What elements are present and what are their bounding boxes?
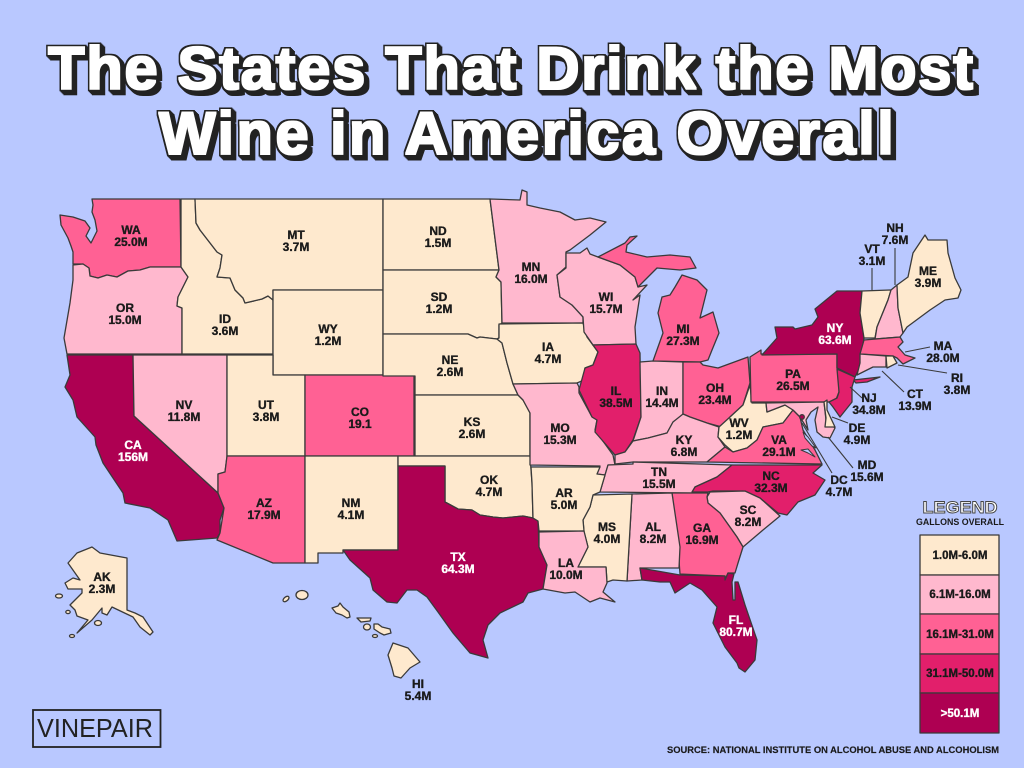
label: MD: MD: [858, 458, 877, 472]
state: Arizona: [217, 456, 305, 563]
state: Minnesota: [490, 190, 606, 323]
label: DE: DE: [849, 421, 865, 435]
state: South Dakota: [383, 270, 502, 339]
label: MT: MT: [287, 228, 305, 242]
state: Florida: [640, 568, 757, 672]
label: KY: 6.8M: [671, 445, 697, 459]
label: ID: ID: [219, 312, 231, 326]
state: Utah: [227, 355, 305, 456]
label: MT: 3.7M: [283, 240, 309, 254]
state: Rhode Island: [886, 356, 897, 368]
leader lines: [802, 248, 947, 473]
label: NY: 63.6M: [818, 333, 852, 347]
island: Hawaii Lanai: [364, 624, 370, 630]
state: Washington DC: [800, 415, 804, 419]
label: TN: 15.5M: [642, 477, 676, 491]
legend swatch 4: [920, 654, 999, 693]
label: ND: 1.5M: [425, 236, 451, 250]
label: AK: 2.3M: [89, 582, 115, 596]
label: DE: 4.9M: [844, 433, 870, 447]
state: New York Long Island: [853, 377, 880, 383]
label: AR: 5.0M: [551, 498, 577, 512]
label: MO: MO: [550, 421, 570, 435]
label: OR: OR: [116, 301, 134, 315]
state: Oregon: [64, 264, 188, 354]
state: Wyoming: [273, 290, 383, 375]
state: Connecticut: [857, 354, 886, 375]
legend swatch 2: [920, 575, 999, 614]
island: Hawaii Niihau: [282, 595, 290, 603]
label: PA: 26.5M: [776, 379, 810, 393]
label: IL: IL: [611, 384, 621, 398]
state: South Carolina: [707, 491, 780, 547]
state: New Mexico: [305, 456, 398, 563]
label: IA: IA: [542, 340, 554, 354]
source: SOURCE: NATIONAL INSTITUTE ON ALCOHOL ABUSE AND ALCOHOLISM: [667, 745, 999, 756]
label: WY: WY: [318, 322, 338, 336]
label: VT: 3.1M: [859, 254, 885, 268]
label: NV: NV: [176, 398, 192, 412]
label: CT: CT: [907, 387, 924, 401]
legend swatch 1: [920, 535, 999, 575]
label: CO: CO: [351, 405, 369, 419]
label: IL: 38.5M: [599, 396, 633, 410]
label: IN: IN: [656, 384, 668, 398]
state: Washington: [60, 199, 181, 278]
label: MA: MA: [934, 339, 953, 353]
label: KS: KS: [464, 415, 480, 429]
label: NY: NY: [827, 321, 843, 335]
legend swatch 5: >50.1M: [941, 708, 979, 720]
label: NM: 4.1M: [338, 508, 364, 522]
label: CA: 156M: [118, 450, 148, 464]
state: New York: [762, 291, 864, 377]
label: WV: 1.2M: [726, 428, 752, 442]
legend swatch 3: 16.1M-31.0M: [926, 629, 994, 641]
state: Idaho: [177, 199, 273, 354]
label: VA: VA: [771, 433, 787, 447]
label: CA: CA: [124, 438, 142, 452]
state: Maryland: [766, 402, 835, 438]
title: The States That Drink the Most: [48, 35, 975, 102]
label: LA: 10.0M: [549, 568, 583, 582]
legend swatch 1: 1.0M-6.0M: [933, 550, 987, 562]
island: Hawaii Maui: [374, 624, 391, 635]
state: Georgia: [672, 493, 743, 580]
label: NJ: NJ: [861, 391, 877, 405]
island: Hawaii Oahu: [332, 603, 350, 618]
label: WV: WV: [729, 416, 749, 430]
state: Illinois: [579, 344, 641, 455]
label: SD: 1.2M: [426, 302, 452, 316]
legend swatch 5: [920, 693, 999, 733]
state: Maine: [897, 235, 961, 333]
state: Virginia: [707, 410, 822, 464]
state: Louisiana: [539, 531, 615, 602]
label: AZ: 17.9M: [247, 508, 281, 522]
label: HI: 5.4M: [405, 689, 431, 703]
label: KS: 2.6M: [459, 427, 485, 441]
label: MN: MN: [522, 260, 540, 274]
state: Mississippi: [578, 494, 632, 582]
state: Missouri: [513, 383, 615, 475]
state: Arkansas: [531, 467, 605, 531]
state: California: [65, 355, 224, 541]
legend swatch 3: [920, 614, 999, 654]
state: New Jersey: [829, 369, 855, 417]
label: MO: 15.3M: [543, 433, 577, 447]
label: WA: 25.0M: [114, 235, 148, 249]
label: AZ: AZ: [256, 496, 272, 510]
state: North Dakota: [383, 199, 499, 270]
legend title: LEGEND: [922, 498, 998, 517]
state: Indiana: [633, 361, 683, 441]
label: FL: FL: [729, 613, 743, 627]
label: LA: LA: [558, 556, 574, 570]
state: Massachusetts: [860, 337, 915, 364]
Chesapeake bay inlets: [801, 432, 816, 457]
label: OR: 15.0M: [108, 313, 142, 327]
label: NE: NE: [442, 353, 458, 367]
label: OK: OK: [480, 473, 498, 487]
label: IN: 14.4M: [645, 396, 679, 410]
state: Ohio: [683, 357, 750, 427]
label: NH: 7.6M: [882, 233, 908, 247]
island: Alaska Kodiak: [94, 620, 102, 626]
label: MI: 27.3M: [666, 334, 700, 348]
state: Oklahoma: [398, 456, 533, 518]
label: HI: HI: [412, 677, 424, 691]
state: Alaska: [65, 547, 153, 635]
label: NE: 2.6M: [437, 365, 463, 379]
label: WI: 15.7M: [589, 302, 623, 316]
state: Delaware: [824, 400, 835, 427]
label: DC: DC: [830, 473, 848, 487]
label: GA: 16.9M: [685, 533, 719, 547]
legend: [916, 498, 1004, 733]
label: MD: 15.6M: [850, 470, 884, 484]
island: Hawaii Big Island: [388, 643, 420, 678]
label: UT: UT: [258, 398, 275, 412]
label: MA: 28.0M: [926, 351, 960, 365]
label: ME: ME: [919, 264, 937, 278]
label: TX: TX: [450, 550, 466, 564]
island: Hawaii Kahoolawe: [372, 634, 378, 638]
state: Pennsylvania: [750, 350, 840, 402]
label: MS: MS: [598, 520, 616, 534]
state: Montana: [195, 199, 383, 303]
island: Hawaii Molokai: [357, 618, 371, 622]
label: DC: 4.7M: [826, 485, 852, 499]
label: WA: WA: [121, 223, 141, 237]
label: WI: WI: [599, 290, 613, 304]
label: OK: 4.7M: [476, 485, 502, 499]
label: TN: TN: [651, 465, 667, 479]
label: SC: SC: [740, 503, 757, 517]
label: AK: AK: [93, 570, 111, 584]
state: Wisconsin: [557, 248, 647, 345]
label: GA: GA: [693, 521, 711, 535]
label: RI: RI: [951, 371, 963, 385]
label: NJ: 34.8M: [852, 403, 886, 417]
state: Michigan Lower Peninsula: [653, 275, 719, 362]
label: MS: 4.0M: [594, 532, 620, 546]
state: Tennessee: [600, 462, 732, 493]
legend subtitle: GALLONS OVERALL: [916, 517, 1004, 527]
label: RI: 3.8M: [944, 383, 970, 397]
island: Aleutian west: [56, 594, 62, 598]
island: Aleutian middle: [66, 610, 70, 614]
label: IA: 4.7M: [535, 352, 561, 366]
label: FL: 80.7M: [719, 625, 753, 639]
state: Iowa: [497, 323, 598, 384]
state: Kentucky: [615, 414, 725, 464]
label: SC: 8.2M: [735, 515, 761, 529]
legend swatch 2: 6.1M-16.0M: [929, 589, 991, 601]
label: OH: OH: [706, 381, 724, 395]
label: OH: 23.4M: [698, 393, 732, 407]
island: Aleutian south: [70, 634, 74, 638]
state: New Hampshire: [875, 285, 903, 339]
label: KY: KY: [676, 433, 692, 447]
label: CT: 13.9M: [898, 399, 932, 413]
state: Kansas: [415, 395, 530, 456]
label: WY: 1.2M: [315, 334, 341, 348]
label: AR: AR: [555, 486, 573, 500]
label: TX: 64.3M: [441, 562, 475, 576]
label: NC: NC: [762, 469, 780, 483]
label: SD: SD: [431, 290, 448, 304]
label: PA: PA: [785, 367, 801, 381]
label: UT: 3.8M: [253, 410, 279, 424]
label: NC: 32.3M: [754, 481, 788, 495]
state: North Carolina: [692, 465, 825, 515]
legend swatch 4: 31.1M-50.0M: [926, 668, 994, 680]
title: [46, 35, 979, 167]
state: Alabama: [627, 493, 680, 581]
label: ND: ND: [429, 224, 447, 238]
state: Vermont: [860, 290, 891, 338]
island: Hawaii Kauai: [296, 590, 308, 600]
label: MN: 16.0M: [514, 272, 548, 286]
label: NM: NM: [342, 496, 360, 510]
state labels: [89, 221, 970, 703]
title: Wine in America Overall: [159, 100, 896, 167]
logo: VINEPAIR: [37, 713, 153, 743]
label: AL: 8.2M: [640, 532, 666, 546]
label: NV: 11.8M: [168, 410, 200, 424]
state: Nevada: [133, 355, 227, 493]
state: Texas: [343, 466, 547, 658]
state: Colorado: [305, 375, 414, 456]
label: NH: NH: [886, 221, 904, 235]
label: AL: AL: [645, 520, 661, 534]
state: West Virginia: [718, 385, 793, 452]
label: ID: 3.6M: [212, 324, 238, 338]
label: VT: VT: [864, 242, 880, 256]
label: VA: 29.1M: [762, 445, 796, 459]
state: Michigan Upper Peninsula: [598, 236, 696, 287]
label: CO: 19.1: [348, 417, 372, 431]
state: Nebraska: [383, 334, 518, 395]
label: MI: MI: [676, 322, 690, 336]
label: ME: 3.9M: [915, 276, 941, 290]
